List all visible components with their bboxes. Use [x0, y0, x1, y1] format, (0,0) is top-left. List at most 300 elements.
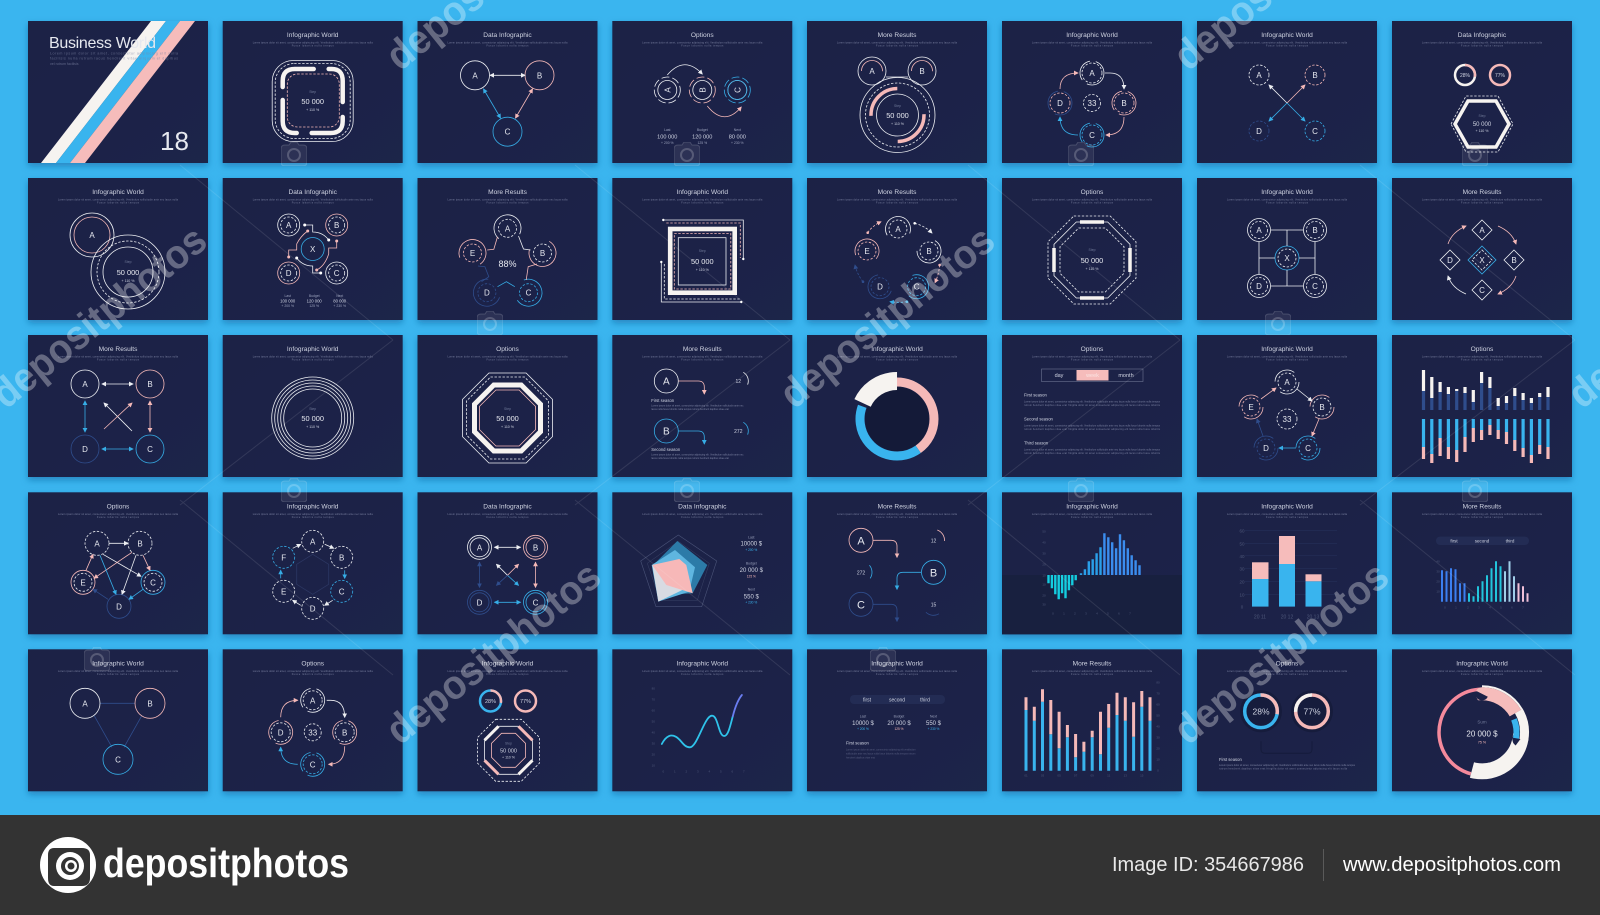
title: Infographic World [1456, 660, 1508, 667]
chart axes: 30 [1042, 551, 1046, 555]
chart axes: 50 [1042, 529, 1046, 533]
stacked bar chart: 40 [1239, 554, 1245, 559]
panel: options ring 33 [223, 649, 403, 791]
tab pill [850, 695, 945, 704]
hub diagram: B [334, 221, 339, 230]
statistics: + 230 % [928, 727, 940, 731]
flow diagram: A [857, 535, 865, 547]
description [448, 670, 568, 676]
histogram axes: 4 [1489, 605, 1491, 609]
description: Lorem ipsum dolor sit amet, consectetur adipiscing elit. Vestibulum sollicitudin ante nec lacus nulla [253, 198, 373, 202]
title: Data Infographic [1458, 32, 1507, 39]
rounded square diagram [272, 60, 353, 142]
panel: two percentage rings [1197, 649, 1377, 791]
percentage rings: 77% [1495, 73, 1506, 79]
title: Infographic World [871, 346, 923, 353]
statistics: Next [336, 294, 343, 298]
percentage rings: 28% [485, 699, 496, 705]
panel: concentric circles [223, 335, 403, 477]
description: Fusce lobortis nulla tempus [1071, 358, 1114, 362]
octagon diagram: 50 000 [1081, 256, 1103, 265]
tab pill: third [1506, 538, 1515, 543]
cross diagram: B [1312, 71, 1318, 80]
description: Fusce lobortis nulla tempus [486, 202, 529, 204]
diamond diagram [1440, 220, 1524, 300]
description: Lorem ipsum dolor sit amet, consectetur adipiscing elit. Vestibulum sollicitudin ante nec lacus nulla [837, 198, 958, 202]
chart axes: 30 [1156, 735, 1160, 739]
description [642, 42, 763, 48]
donut chart: 75 % [1478, 740, 1487, 744]
radar chart [641, 535, 717, 607]
description: Fusce lobortis nulla tempus [1266, 44, 1309, 48]
panel: pentagon 88 percent [418, 178, 598, 320]
description: Fusce lobortis nulla tempus [1266, 516, 1309, 519]
bar chart [1048, 533, 1140, 599]
season text blocks: Third season [1024, 440, 1049, 446]
panel: dashed pentagon [807, 178, 987, 320]
description: Lorem ipsum dolor sit amet, consectetur adipiscing elit. Vestibulum sollicitudin ante nec lacus nulla [1422, 513, 1543, 516]
line chart axes: 60 [652, 708, 655, 712]
statistics: + 200 % [281, 304, 294, 308]
description [58, 513, 179, 519]
season text blocks: Second season [1024, 416, 1054, 422]
description: Lorem ipsum dolor sit amet, consectetur adipiscing elit. Vestibulum sollicitudin ante nec lacus nulla [448, 670, 568, 673]
statistics: Next [734, 128, 741, 132]
panel: donut with segment [807, 335, 987, 477]
description: Fusce lobortis nulla tempus [292, 44, 334, 48]
panel: X four nodes [1197, 178, 1377, 320]
season text blocks: rutrum hendrerit dapibus vitae erat fringilla dolor sit amet consectetur adipiscing elit lacus nulla fusce lobortis [1024, 428, 1161, 431]
tab pill [1436, 537, 1529, 545]
stacked bar chart: 30 [1239, 566, 1245, 571]
node square: A [477, 543, 483, 552]
title: Options [1081, 189, 1104, 196]
description: Fusce lobortis nulla tempus [1071, 516, 1114, 519]
description [837, 198, 958, 204]
connected nodes [1248, 218, 1326, 298]
pentagon diagram: E [1248, 403, 1254, 412]
description: Lorem ipsum dolor sit amet, consectetur adipiscing elit. Vestibulum sollicitudin ante nec lacus nulla [253, 513, 373, 516]
octagon rings [462, 373, 552, 463]
divider [1323, 849, 1324, 881]
darker lower zone [1002, 575, 1182, 634]
line chart axes: 50 [652, 719, 655, 723]
octagon rings: Step [504, 407, 511, 411]
title: Infographic World [1261, 503, 1313, 510]
ring diagram: A [310, 696, 316, 705]
line chart axes: 80 [652, 686, 655, 690]
panel: three step options [612, 21, 792, 163]
panel: tabs with statistics [807, 649, 987, 791]
statistics: + 200 % [857, 727, 869, 731]
stacked bar chart: 20 13 [1307, 614, 1319, 620]
stacked bar chart [1239, 528, 1337, 620]
diamond diagram: A [1479, 226, 1485, 235]
description: Fusce lobortis nulla tempus [486, 673, 529, 676]
description [253, 670, 373, 676]
network diagram: B [137, 539, 143, 548]
ring diagram: B [1121, 99, 1127, 108]
histogram axes [1436, 559, 1524, 609]
footer bar [0, 815, 1600, 915]
season flow A: First season [651, 398, 675, 403]
panel: diamonds [1392, 178, 1572, 320]
description [448, 513, 568, 519]
description: Lorem ipsum dolor sit amet, consectetur adipiscing elit. Vestibulum sollicitudin ante nec lacus nulla [1227, 670, 1348, 673]
panel: radar chart [612, 492, 792, 634]
chart axes: 80 [1156, 680, 1160, 684]
percentage rings: 77% [1303, 706, 1321, 716]
season text [1219, 757, 1356, 770]
description: Fusce lobortis nulla tempus [876, 516, 919, 519]
ring diagram [1048, 61, 1136, 147]
flow diagram: 12 [931, 538, 936, 544]
description: Fusce lobortis nulla tempus [1461, 673, 1504, 676]
description: Fusce lobortis nulla tempus [486, 358, 529, 362]
season text blocks: First season [1024, 392, 1047, 398]
panel: positive negative bars [1002, 492, 1182, 634]
description: Fusce lobortis nulla tempus [1071, 673, 1114, 676]
statistics: + 230 % [333, 304, 346, 308]
season text: rutrum hendrerit dapibus vitae erat fringilla dolor sit amet consectetur adipiscing elit lacus nulla [1219, 767, 1348, 770]
chart axes: 10 [1042, 582, 1046, 586]
season text [846, 740, 916, 759]
title: Options [1276, 660, 1299, 667]
hub diagram: D [286, 269, 292, 278]
line chart axes: 5 [720, 769, 722, 773]
description: Lorem ipsum dolor sit amet, consectetur adipiscing elit. Vestibulum sollicitudin ante nec lacus nulla [58, 198, 179, 202]
cover description: Lorem ipsum dolor sit amet, consectetur adipiscing elit nulla [50, 52, 178, 56]
node square: D [477, 598, 483, 607]
circle diagram: + 110 % [121, 279, 135, 283]
squares diagram: + 110 % [696, 268, 710, 272]
description [1227, 670, 1348, 676]
title: Options [496, 346, 520, 353]
pentagon diagram: A [505, 224, 511, 233]
description: Fusce lobortis nulla tempus [876, 673, 919, 676]
connected nodes: X [1284, 254, 1290, 263]
statistics: + 230 % [731, 141, 744, 145]
chart axes: 11 [1107, 773, 1111, 777]
description [642, 356, 763, 362]
stacked bar chart: 10 [1239, 592, 1245, 597]
description [1422, 670, 1543, 676]
stacked bar chart: 20 [1239, 579, 1245, 584]
description [1422, 513, 1543, 519]
chart axes: 60 [1156, 702, 1160, 706]
description [58, 670, 179, 676]
panel: pentagon 33 [1197, 335, 1377, 477]
node square: B [147, 380, 153, 389]
title: More Results [878, 189, 917, 196]
description [1227, 42, 1348, 48]
panel: overlapping circles [28, 178, 208, 320]
octagon step: 50 000 [500, 748, 517, 754]
diamond diagram: D [1447, 256, 1453, 265]
panel: triangle simple [28, 649, 208, 791]
description [1227, 198, 1348, 204]
triangle diagram: A [472, 71, 478, 80]
pentagon diagram: B [540, 249, 545, 258]
description [1032, 42, 1153, 48]
octagon diagram: + 110 % [1085, 267, 1099, 271]
radar statistics: Last [748, 535, 755, 539]
description: Lorem ipsum dolor sit amet, consectetur adipiscing elit. Vestibulum sollicitudin ante nec lacus nulla [837, 356, 958, 358]
radar statistics [740, 535, 764, 604]
triangle diagram: B [147, 699, 153, 708]
description [58, 198, 179, 204]
hexagon step: Step [1479, 114, 1486, 118]
line chart axes: 0 [662, 769, 664, 773]
tab switcher: week [1085, 373, 1099, 379]
pentagon diagram: 88% [498, 259, 517, 269]
chart axes: 40 [1156, 724, 1160, 728]
description: Lorem ipsum dolor sit amet, consectetur adipiscing elit. Vestibulum sollicitudin ante nec lacus nulla [253, 356, 373, 358]
panel: flow with numbers [807, 492, 987, 634]
website: www.depositphotos.com [1342, 854, 1561, 876]
description [1227, 356, 1348, 362]
statistics: 125 % [697, 141, 707, 145]
hexagon step: + 110 % [1475, 129, 1489, 133]
title: Data Infographic [483, 32, 532, 39]
title: Infographic World [287, 503, 339, 510]
cover title: Business World [49, 35, 156, 52]
title: Infographic World [677, 189, 728, 196]
title: Data Infographic [678, 503, 727, 510]
description: Fusce lobortis nulla tempus [97, 516, 140, 519]
description: Lorem ipsum dolor sit amet, consectetur adipiscing elit. Vestibulum sollicitudin ante nec lacus nulla [448, 356, 568, 358]
histogram axes: 3 [1478, 605, 1480, 609]
tab pill: second [1475, 538, 1490, 543]
statistics [657, 128, 746, 145]
season text blocks: Lorem ipsum dolor sit amet, consectetur adipiscing elit. Vestibulum sollicitudin ante nec lacus nulla fusce lobortis nulla tempus [1024, 400, 1161, 404]
histogram [1442, 561, 1528, 602]
title: Options [301, 660, 325, 667]
logo wordmark: depositphotos [103, 840, 349, 886]
description: Fusce lobortis nulla tempus [876, 44, 919, 48]
chart axes [1024, 680, 1160, 777]
squares diagram: Step [699, 249, 706, 253]
panel: double octagon [418, 335, 598, 477]
bar chart [1026, 689, 1150, 771]
statistics: 120 000 [692, 134, 712, 140]
network diagram [71, 531, 165, 618]
description: Lorem ipsum dolor sit amet, consectetur adipiscing elit. Vestibulum sollicitudin ante nec lacus nulla [642, 513, 763, 516]
connected nodes: A [1256, 226, 1262, 235]
circle diagram: 50 000 [886, 111, 909, 120]
description [642, 670, 763, 676]
description: Lorem ipsum dolor sit amet, consectetur adipiscing elit. Vestibulum sollicitudin ante nec lacus nulla [448, 42, 568, 44]
chart axes: 0 [1052, 611, 1054, 615]
ring diagram: A [1089, 69, 1095, 78]
histogram axes: 0 [1444, 605, 1446, 609]
statistics [280, 294, 347, 308]
line chart axes: 20 [652, 752, 655, 756]
statistics: Budget [309, 294, 320, 298]
chart axes: 09 [1091, 773, 1094, 777]
donut chart [1424, 674, 1540, 790]
title: More Results [1463, 189, 1502, 196]
percentage rings: 28% [1252, 706, 1270, 716]
stacked bar chart: 60 [1239, 528, 1245, 533]
season flow A: A [663, 376, 670, 388]
tab switcher [1042, 369, 1143, 382]
description: Lorem ipsum dolor sit amet, consectetur adipiscing elit. Vestibulum sollicitudin ante nec lacus nulla [1422, 42, 1543, 44]
circle diagram [70, 213, 165, 309]
diamond diagram: B [1511, 256, 1517, 265]
ring diagram: C [1089, 131, 1095, 140]
chart axes: 7 [1129, 611, 1131, 615]
description: Fusce lobortis nulla tempus [97, 673, 140, 676]
hexagon ring: B [339, 553, 344, 562]
description: Fusce lobortis nulla tempus [292, 358, 334, 362]
description: Fusce lobortis nulla tempus [681, 44, 724, 48]
title: More Results [1073, 660, 1112, 667]
chart axes: 70 [1156, 691, 1160, 695]
chart axes: 30 [1042, 602, 1046, 606]
description: Lorem ipsum dolor sit amet, consectetur adipiscing elit. Vestibulum sollicitudin ante nec lacus nulla [253, 670, 373, 673]
histogram axes: 1 [1455, 605, 1457, 609]
hub diagram: X [310, 245, 316, 254]
description [837, 513, 958, 519]
diamond diagram: X [1479, 256, 1485, 265]
histogram axes: 2 [1467, 605, 1469, 609]
statistics: 80 000 [333, 298, 347, 304]
description: Fusce lobortis nulla tempus [1461, 202, 1504, 204]
season text blocks: Lorem ipsum dolor sit amet, consectetur adipiscing elit. Vestibulum sollicitudin ante nec lacus nulla fusce lobortis nulla tempus [1024, 448, 1161, 452]
description [1032, 513, 1153, 519]
description: Lorem ipsum dolor sit amet, consectetur adipiscing elit. Vestibulum sollicitudin ante nec lacus nulla [1227, 356, 1348, 358]
description [837, 356, 958, 362]
octagon step [478, 719, 540, 781]
panel: four large nodes [28, 335, 208, 477]
cross diagram: D [1256, 127, 1262, 136]
diagonal stripes [41, 21, 195, 163]
chart axes: 20 [1042, 562, 1046, 566]
panel: octagon percentages [418, 649, 598, 791]
description: Fusce lobortis nulla tempus [1461, 516, 1504, 519]
histogram axes: 20 [1436, 579, 1440, 583]
description: Lorem ipsum dolor sit amet, consectetur adipiscing elit. Vestibulum sollicitudin ante nec lacus nulla [58, 513, 179, 516]
title: More Results [1463, 503, 1502, 510]
radar statistics: 20 000 $ [740, 568, 764, 574]
chart axes [1042, 529, 1131, 615]
statistics [852, 714, 942, 731]
statistics: 125 % [894, 727, 904, 731]
histogram axes: 10 [1436, 589, 1440, 593]
line chart axes: 2 [685, 769, 687, 773]
description: Fusce lobortis nulla tempus [681, 673, 724, 676]
chart axes: 13 [1124, 773, 1127, 777]
chart axes: 6 [1118, 611, 1120, 615]
description: Fusce lobortis nulla tempus [97, 202, 140, 204]
percentage rings: 28% [1460, 73, 1471, 79]
connected nodes: C [1312, 282, 1318, 291]
octagon rings: + 110 % [501, 425, 515, 429]
statistics: 125 % [309, 304, 319, 308]
chart axes: 10 [1042, 573, 1046, 577]
title: Infographic World [1261, 189, 1313, 196]
hub diagram [278, 214, 348, 284]
statistics: + 200 % [661, 141, 674, 145]
description [837, 42, 958, 48]
title: More Results [878, 503, 917, 510]
radar statistics: 10000 $ [740, 541, 763, 547]
chart axes: 4 [1096, 611, 1098, 615]
statistics: 120 000 [307, 298, 322, 304]
description: Lorem ipsum dolor sit amet, consectetur adipiscing elit. Vestibulum sollicitudin ante nec lacus nulla [1032, 670, 1153, 673]
three circles: B [698, 87, 707, 93]
description: Fusce lobortis nulla tempus [876, 358, 919, 362]
description: Lorem ipsum dolor sit amet, consectetur adipiscing elit. Vestibulum sollicitudin ante nec lacus nulla [253, 42, 373, 44]
chart axes: 20 [1042, 593, 1046, 597]
chart axes: 05 [1057, 773, 1061, 777]
dashed ring diagram: C [914, 283, 920, 292]
description: Fusce lobortis nulla tempus [1461, 358, 1504, 362]
hexagon ring: F [281, 553, 286, 562]
pentagon diagram: C [526, 289, 532, 298]
chart axes: 15 [1140, 773, 1144, 777]
panel: Business World cover [28, 21, 208, 163]
ring diagram: 33 [1088, 99, 1097, 108]
title: Infographic World [92, 189, 144, 196]
node square: A [82, 380, 88, 389]
octagon diagram: Step [1089, 248, 1096, 252]
title: Infographic World [287, 32, 339, 39]
donut chart: 20 000 $ [1466, 729, 1498, 738]
season text: Lorem ipsum dolor sit amet, consectetur adipiscing elit vestibulum [846, 748, 916, 751]
chart axes: 0 [1157, 768, 1159, 772]
pentagon diagram: C [1305, 444, 1311, 453]
network diagram: E [80, 578, 86, 587]
histogram axes: 5 [1500, 605, 1502, 609]
stacked bar chart: 0 [1241, 604, 1244, 609]
icon: camera logo [40, 837, 96, 893]
watermark diagonal lines [180, 165, 1575, 675]
watermark text: depositphotos [1165, 552, 1397, 753]
flow diagram [846, 526, 949, 621]
season flow B: Second season [651, 447, 681, 452]
chart axes: 07 [1074, 773, 1078, 777]
description: Lorem ipsum dolor sit amet, consectetur adipiscing elit. Vestibulum sollicitudin ante nec lacus nulla [58, 670, 179, 673]
season flow B: 272 [734, 429, 743, 435]
title: Infographic World [287, 346, 339, 353]
pentagon diagram: 33 [1283, 415, 1292, 424]
statistics: Last [664, 128, 671, 132]
season text: First season [846, 740, 869, 745]
panel: four nodes cross arrows [418, 492, 598, 634]
chart axes: 20 [1156, 746, 1160, 750]
description: Fusce lobortis nulla tempus [681, 358, 724, 362]
statistics: Next [930, 714, 937, 718]
season flow B: lacus nulla fusce lobortis nulla tempus rutrum hendrerit dapibus vitae erat [651, 457, 729, 460]
season text blocks: rutrum hendrerit dapibus vitae erat fringilla dolor sit amet consectetur adipiscing elit lacus nulla fusce lobortis [1024, 452, 1161, 455]
dashed ring diagram: A [895, 225, 901, 234]
connected nodes: B [1312, 226, 1318, 235]
octagon step: + 110 % [502, 755, 516, 759]
circle diagram: A [89, 231, 95, 240]
three circles [654, 65, 750, 117]
statistics: Last [284, 294, 291, 298]
watermark text: depositphotos [771, 216, 1003, 417]
panel: tabs and seasons [1002, 335, 1182, 477]
title: Infographic World [1261, 32, 1313, 39]
description: Fusce lobortis nulla tempus [681, 202, 724, 204]
three circles: A [663, 87, 672, 93]
description: Lorem ipsum dolor sit amet, consectetur adipiscing elit. Vestibulum sollicitudin ante nec lacus nulla [642, 198, 763, 202]
description [58, 356, 179, 362]
title: Infographic World [1066, 32, 1118, 39]
